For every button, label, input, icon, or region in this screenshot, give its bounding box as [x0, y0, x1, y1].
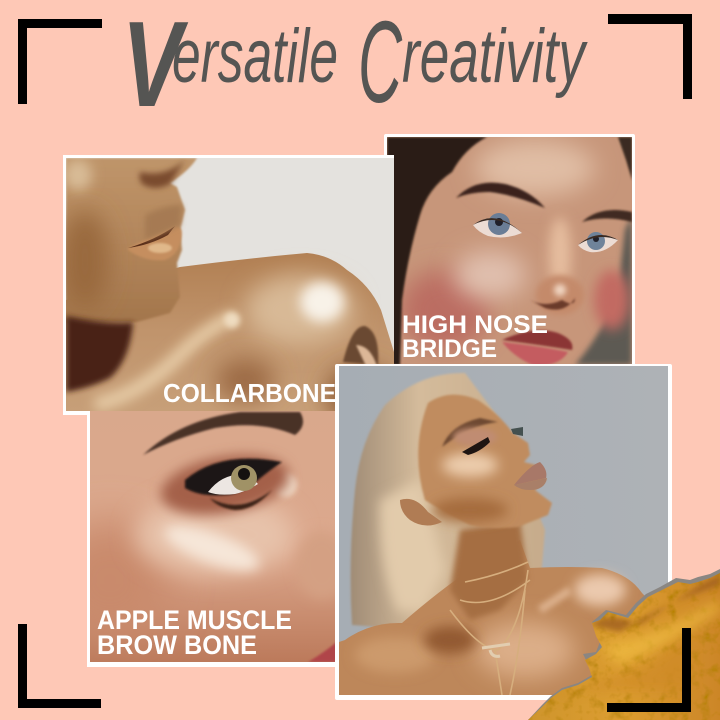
label: high nose bridge: HIGH NOSE — [402, 311, 548, 339]
label: apple muscle brow bone — [97, 605, 292, 660]
title: V — [122, 0, 188, 132]
corner bracket: bottom left — [18, 624, 101, 708]
title: reativity — [402, 14, 588, 99]
panel: collarbone — [61, 155, 394, 425]
photo: blonde model — [339, 366, 668, 695]
photo: cheek and eye — [90, 411, 335, 662]
panel: apple muscle brow bone — [87, 411, 335, 667]
label: high nose bridge: BRIDGE — [402, 335, 497, 363]
title — [122, 0, 588, 132]
title: C — [358, 0, 403, 127]
corner bracket: top right — [608, 14, 692, 99]
label: apple muscle brow bone: BROW BONE — [97, 630, 257, 660]
corner bracket: bottom right — [607, 628, 691, 712]
corner bracket: top left — [18, 19, 102, 104]
panel: full look portrait — [335, 364, 672, 700]
gold pigment swatch — [520, 565, 720, 720]
label: collarbone: COLLARBONE — [163, 378, 336, 408]
title: ersatile — [172, 14, 338, 99]
label: apple muscle brow bone: APPLE MUSCLE — [97, 605, 292, 635]
photo: lips and shoulder — [61, 158, 394, 425]
label: high nose bridge — [402, 311, 548, 363]
panel: high nose bridge — [384, 134, 635, 366]
photo: face with blush — [387, 137, 632, 366]
